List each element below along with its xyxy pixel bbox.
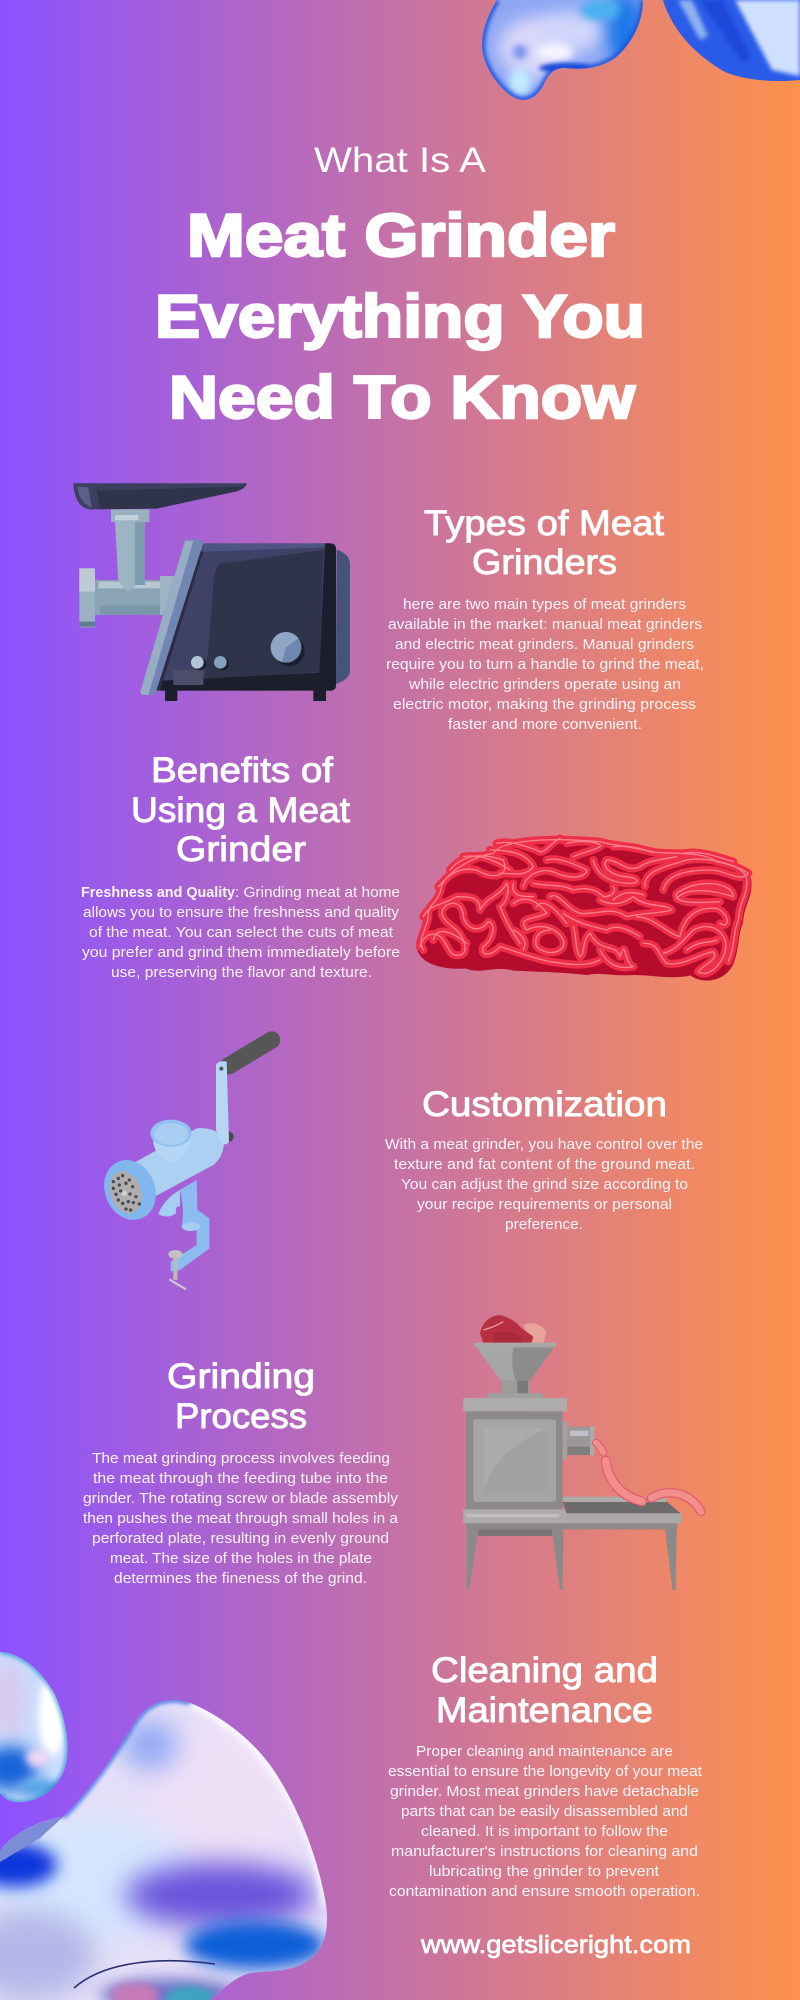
body text: benefits: Freshness and Quality bbox=[81, 885, 235, 901]
body text: grinding process: The meat grinding process involves feeding bbox=[92, 1451, 390, 1467]
heading: customization: Customization bbox=[422, 1085, 667, 1124]
decorative blob: bottom left large bbox=[0, 1690, 335, 2000]
illustration: industrial grinder with sausage bbox=[463, 1315, 701, 1590]
body text: cleaning bbox=[388, 1744, 702, 1900]
body text: cleaning: lubricating the grinder to prevent bbox=[429, 1864, 659, 1880]
body text: cleaning: grinder. Most meat grinders have detachable bbox=[390, 1784, 699, 1800]
title: Need To Know: Need To Know bbox=[169, 364, 635, 431]
title: Everything You: Everything You bbox=[155, 283, 645, 350]
heading: types: Grinders bbox=[472, 543, 617, 582]
body text: grinding process: the meat through the feeding tube into the bbox=[93, 1471, 388, 1487]
body text: types: require you to turn a handle to grind the meat, bbox=[386, 657, 704, 673]
body text: benefits: : Grinding meat at home bbox=[235, 885, 400, 901]
decorative blob: bottom left small bbox=[0, 1652, 68, 1802]
section: types of meat grinders bbox=[386, 504, 704, 733]
illustration: manual meat grinder bbox=[95, 1040, 272, 1289]
body text: benefits bbox=[81, 885, 400, 981]
body text: cleaning: parts that can be easily disassembled and bbox=[401, 1804, 688, 1820]
body text: types: faster and more convenient. bbox=[448, 717, 642, 733]
title: What Is A: What Is A bbox=[314, 141, 487, 180]
section: customization bbox=[385, 1085, 703, 1233]
body text: types: while electric grinders operate using an bbox=[408, 677, 681, 693]
decorative blob: top right bbox=[660, 0, 800, 85]
body text: customization: your recipe requirements or personal bbox=[417, 1197, 672, 1213]
body text: grinding process: meat. The size of the holes in the plate bbox=[110, 1551, 372, 1567]
sausages bbox=[596, 1443, 701, 1512]
heading: benefits: Benefits of bbox=[151, 751, 333, 790]
body text: grinding process: perforated plate, resulting in evenly ground bbox=[92, 1531, 389, 1547]
body text: types: electric motor, making the grinding process bbox=[393, 697, 696, 713]
decorative blob: top centre bbox=[480, 0, 645, 102]
section: benefits bbox=[81, 751, 400, 981]
website url: www.getsliceright.com bbox=[420, 1931, 691, 1959]
meat on hopper bbox=[480, 1315, 547, 1343]
body text: customization: preference. bbox=[505, 1217, 583, 1233]
title: Meat Grinder: Meat Grinder bbox=[187, 202, 615, 269]
section: cleaning and maintenance bbox=[388, 1651, 702, 1900]
heading: grinding process bbox=[167, 1357, 315, 1436]
body text: cleaning: cleaned. It is important to follow the bbox=[421, 1824, 668, 1840]
body text: types: and electric meat grinders. Manual grinders bbox=[395, 637, 694, 653]
section: grinding process bbox=[83, 1357, 399, 1587]
body text: types: available in the market: manual meat grinders bbox=[388, 617, 702, 633]
heading: grinding process: Grinding bbox=[167, 1357, 315, 1396]
heading: grinding process: Process bbox=[175, 1397, 307, 1436]
body text: benefits: use, preserving the flavor and texture. bbox=[111, 965, 372, 981]
body text: cleaning: Proper cleaning and maintenance are bbox=[416, 1744, 673, 1760]
body text: types: here are two main types of meat grinders bbox=[403, 597, 686, 613]
heading: cleaning bbox=[431, 1651, 658, 1730]
body text: benefits: you prefer and grind them immediately before bbox=[82, 945, 400, 961]
body text: cleaning: manufacturer's instructions for cleaning and bbox=[391, 1844, 698, 1860]
body text: benefits: of the meat. You can select the cuts of meat bbox=[89, 925, 393, 941]
body text: benefits: allows you to ensure the freshness and quality bbox=[83, 905, 400, 921]
heading: benefits: Using a Meat bbox=[131, 791, 350, 830]
heading: types bbox=[424, 504, 664, 582]
illustration: electric meat grinder bbox=[73, 483, 350, 701]
heading: cleaning: Maintenance bbox=[436, 1691, 653, 1730]
heading: cleaning: Cleaning and bbox=[431, 1651, 658, 1690]
title block bbox=[155, 141, 645, 431]
body text: grinding process: grinder. The rotating screw or blade assembly bbox=[83, 1491, 399, 1507]
heading: benefits bbox=[131, 751, 350, 869]
body text: grinding process: determines the fineness of the grind. bbox=[114, 1571, 367, 1587]
heading: benefits: Grinder bbox=[176, 830, 306, 869]
body text: customization: texture and fat content of the ground meat. bbox=[394, 1157, 695, 1173]
body text: grinding process: then pushes the meat through small holes in a bbox=[83, 1511, 399, 1527]
body text: customization: With a meat grinder, you have control over the bbox=[385, 1137, 703, 1153]
body text: types bbox=[386, 597, 704, 733]
body text: customization: You can adjust the grind size according to bbox=[401, 1177, 688, 1193]
body text: customization bbox=[385, 1137, 703, 1233]
body text: grinding process bbox=[83, 1451, 399, 1587]
illustration: ground meat bbox=[420, 838, 748, 976]
body text: cleaning: essential to ensure the longevity of your meat bbox=[388, 1764, 702, 1780]
body text: cleaning: contamination and ensure smooth operation. bbox=[389, 1884, 700, 1900]
heading: types: Types of Meat bbox=[424, 504, 664, 543]
